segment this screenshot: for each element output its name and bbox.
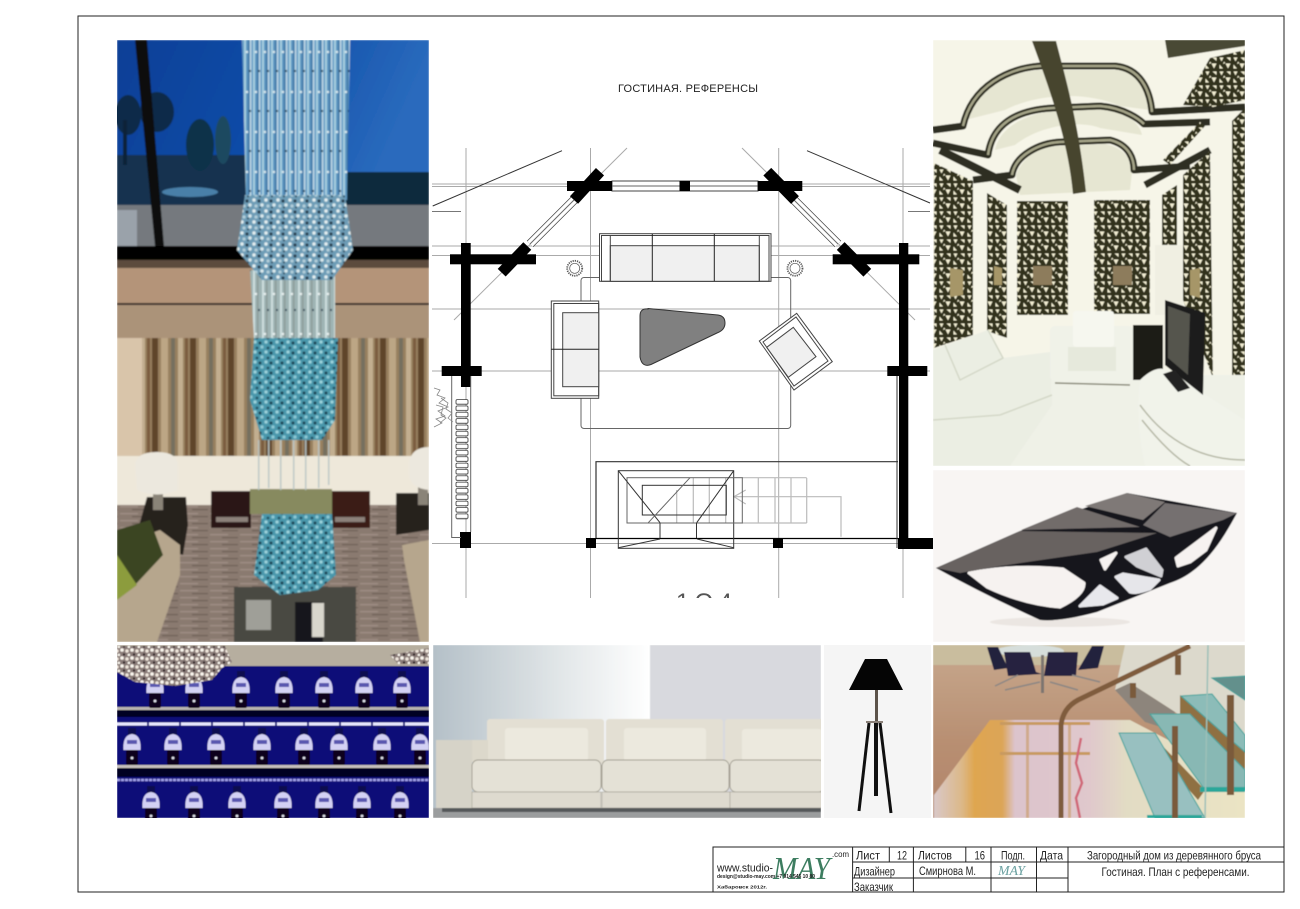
tan beams [117, 260, 429, 338]
chandelier lower strings over beams [250, 270, 335, 338]
photo: white modular sofa [433, 645, 825, 818]
onyx floor panel [934, 720, 1245, 818]
logo [716, 850, 849, 890]
window sill band [117, 246, 429, 260]
right wall inner line [896, 376, 898, 548]
back wall [933, 645, 1245, 665]
white shelf stack [1155, 245, 1183, 315]
ceiling central beam [1032, 41, 1086, 194]
triangular coffee table [640, 308, 725, 365]
evening sky through window [117, 40, 429, 180]
title block labels: Заказчик [854, 880, 894, 894]
carpet [117, 505, 429, 642]
chandelier middle cluster [250, 338, 338, 440]
treeline and terrace [115, 92, 429, 246]
stair light steps [677, 478, 841, 537]
logo: design@studio-may.com +7 914 545 10 80 [717, 874, 815, 880]
dining table and chairs [987, 645, 1104, 693]
table openings [969, 528, 1216, 607]
photo: lattice white room [933, 40, 1245, 466]
floor [1212, 374, 1245, 418]
dark side table [1133, 325, 1163, 380]
signature: MAY [997, 864, 1027, 879]
floor [433, 808, 821, 818]
chandelier upper strings [242, 40, 350, 200]
lattice panels [933, 110, 1245, 376]
back cushions [505, 728, 822, 761]
bottles row 1 [146, 671, 411, 708]
cut-off drawing number: 1 О 4 [676, 589, 732, 616]
white armchair [1050, 311, 1133, 385]
blue background [117, 645, 429, 818]
lamp background [824, 645, 931, 818]
lamp stem [875, 690, 878, 725]
title block labels: Листов [918, 848, 952, 862]
table base [936, 493, 1237, 620]
chandelier lower cluster [254, 514, 336, 595]
table floor shadow [990, 617, 1130, 627]
sofa base [472, 792, 825, 808]
right sofa [402, 540, 429, 642]
left side table and lamp [135, 452, 188, 555]
photo: crystal chandelier living room [115, 40, 429, 642]
chandelier upper cluster [237, 195, 353, 280]
photo: wine bottles on blue shelves [117, 645, 429, 823]
left sofa with cushions [117, 520, 180, 642]
right white wall [1115, 645, 1245, 760]
top-right ceiling lattice [1183, 50, 1245, 107]
sofa cushion edges [933, 330, 1052, 420]
floor plan [432, 148, 933, 616]
logo: .com [832, 850, 849, 859]
crystal glitter [117, 646, 429, 686]
right side table and lamp [396, 447, 429, 535]
stair posts [1130, 655, 1234, 818]
sofa left [551, 301, 599, 398]
step supports [1140, 695, 1245, 800]
panel centre squares [950, 266, 1200, 298]
title block labels [854, 848, 1261, 894]
floor lamps [567, 261, 802, 276]
window mullion [135, 40, 164, 246]
windows [530, 181, 838, 244]
photo: tripod floor lamp [824, 645, 931, 818]
white sofa [934, 330, 1050, 375]
logo: Хабаровск 2012г. [717, 884, 767, 890]
chandelier sparse strings [258, 440, 329, 490]
sofa top [600, 234, 771, 281]
logo: MAY [772, 850, 833, 886]
tripod legs [859, 722, 891, 813]
left wall [433, 645, 650, 818]
armchair [759, 313, 832, 390]
title block labels: Лист [856, 848, 880, 862]
bottles row 2 [123, 728, 429, 765]
plant [434, 388, 453, 427]
plan grid lines [432, 148, 930, 598]
title block labels: Смирнова М. [919, 864, 976, 878]
heading: ГОСТИНАЯ. РЕФЕРЕНСЫ [618, 83, 758, 95]
sofa shadow strip [442, 808, 821, 812]
ceiling band [117, 645, 429, 666]
title block labels: 16 [974, 848, 985, 862]
ceiling arches [933, 66, 1245, 190]
glass steps [1119, 676, 1245, 818]
table photo background [933, 470, 1245, 642]
sofa arm [436, 740, 472, 808]
seat cushions [472, 760, 825, 792]
shelf labels [117, 724, 429, 780]
title block grid [713, 847, 1284, 892]
dark storage boxes [211, 491, 370, 528]
room base [933, 40, 1245, 375]
arch mirror inlays [963, 66, 1152, 175]
staircase [596, 376, 898, 548]
photo: glass staircase and onyx floor [933, 645, 1245, 818]
lamp shade [849, 659, 903, 690]
curtains [141, 338, 429, 456]
title block labels: Дизайнер [854, 864, 895, 878]
title block labels: Загородный дом из деревянного бруса [1087, 848, 1261, 862]
sofa backs [487, 719, 825, 764]
title block labels: Гостиная. План с референсами. [1102, 865, 1250, 879]
wood floor [933, 665, 1245, 818]
table top surface [936, 493, 1237, 573]
television [1163, 300, 1205, 395]
title block [713, 847, 1284, 894]
photo: sculptural table [933, 470, 1245, 642]
title block labels: Подп. [1001, 848, 1025, 862]
stair enclosure [596, 462, 898, 548]
radiator [452, 376, 471, 538]
bottles row 3 [142, 786, 409, 823]
window reflections [1000, 722, 1090, 818]
logo: www.studio- [716, 862, 773, 874]
wall left [117, 338, 142, 456]
title block labels: 12 [897, 848, 907, 862]
black walls and posts [442, 172, 933, 549]
title block labels: Дата [1040, 848, 1063, 862]
coffee table [234, 587, 356, 642]
green glass table [250, 489, 332, 514]
roof lines [432, 151, 930, 212]
handrail [1061, 646, 1190, 818]
round TV console [1138, 369, 1245, 466]
lit wall [117, 456, 429, 506]
shelves [117, 707, 429, 777]
wall base shadow [1115, 683, 1175, 730]
ceiling shading [965, 70, 1150, 195]
rug [581, 278, 791, 428]
glass panel edge [1205, 645, 1208, 818]
glass step edges [1147, 787, 1245, 818]
right wall [650, 645, 821, 818]
